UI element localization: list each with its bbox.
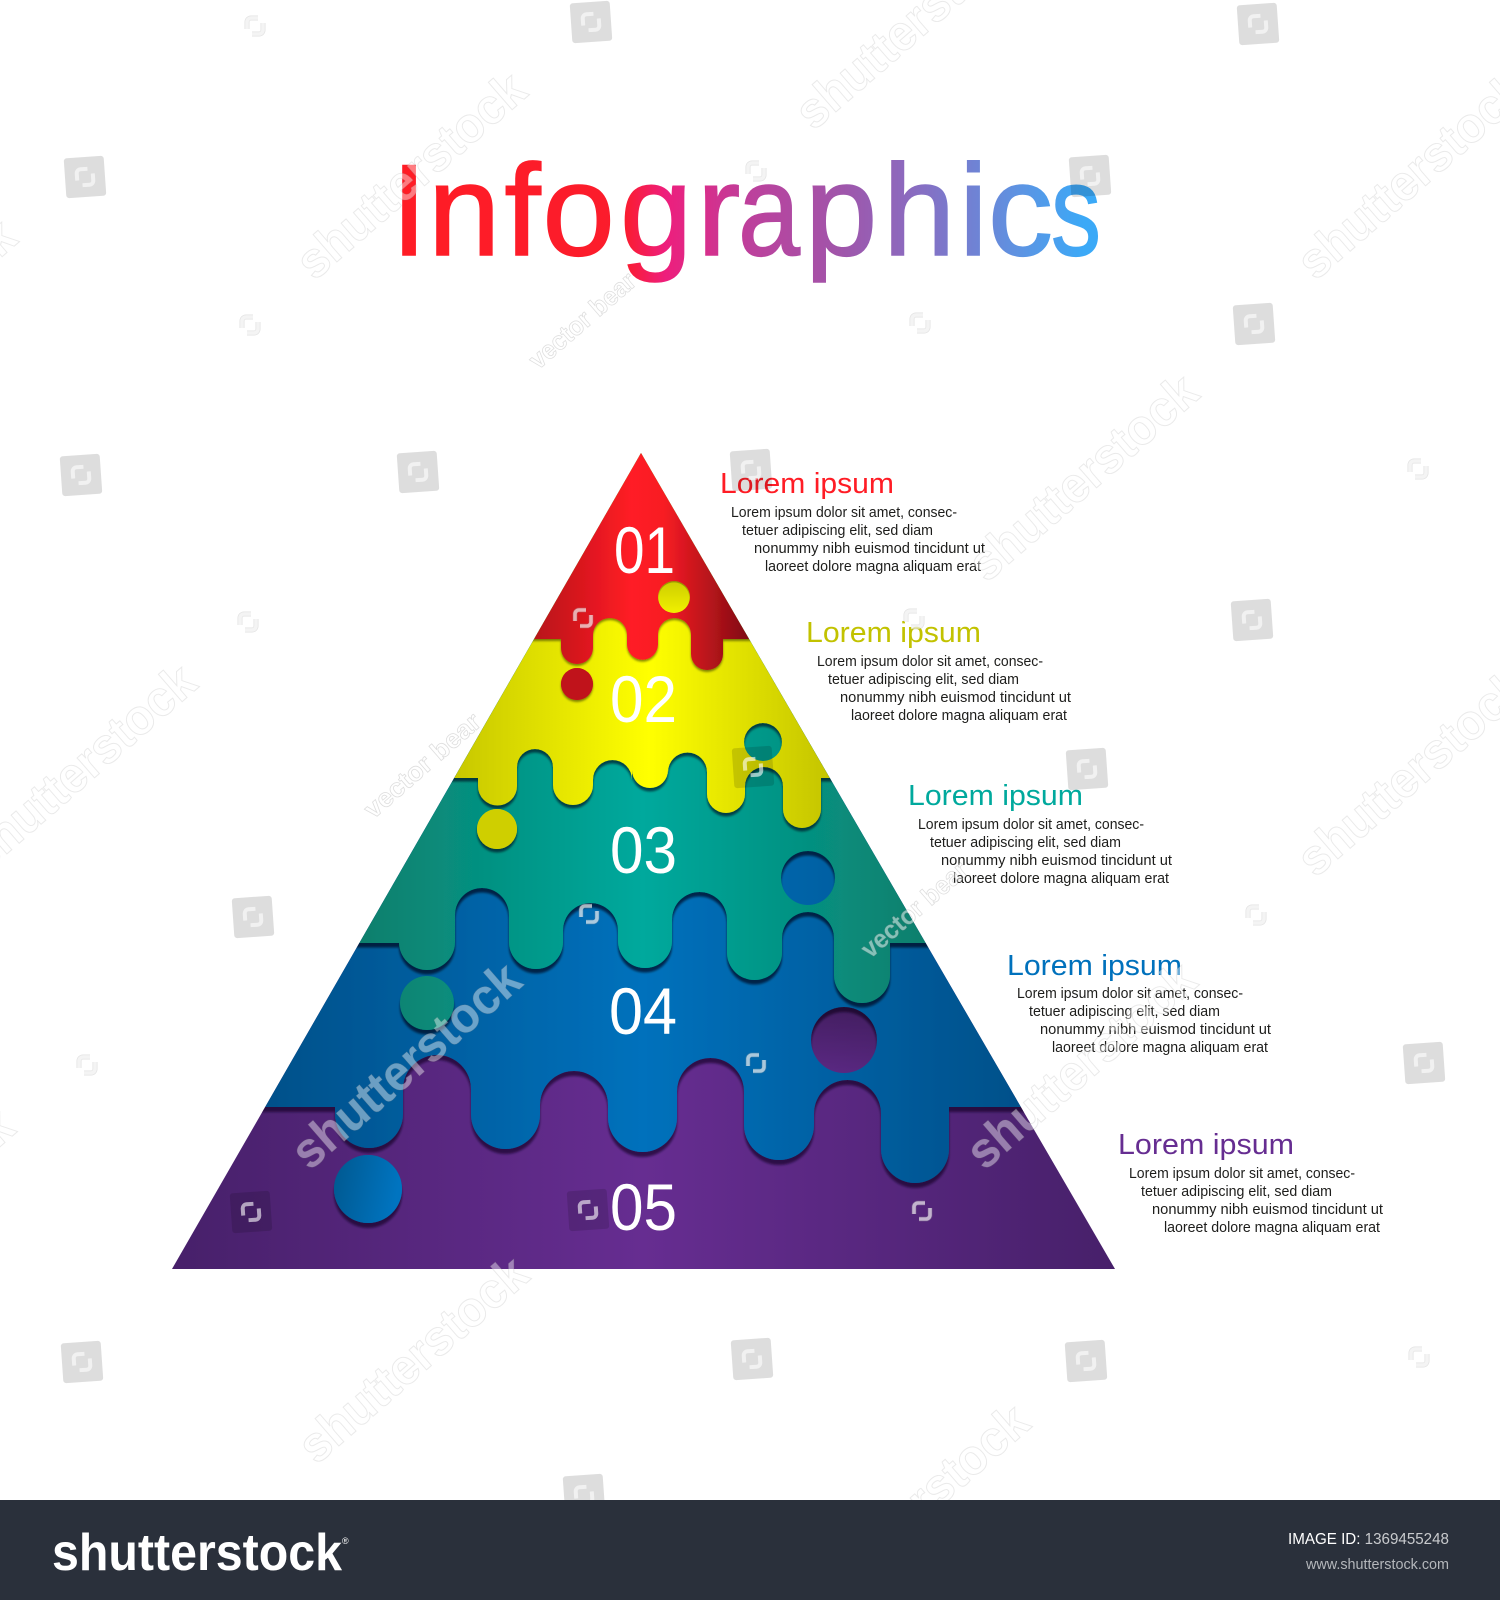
body 03 — [918, 816, 1173, 887]
layer 03: teal — [356, 453, 929, 1036]
body 05: laoreet dolore magna aliquam erat — [1164, 1219, 1381, 1236]
layer 02: yellow — [452, 453, 832, 854]
number 01: 01 — [614, 513, 675, 587]
heading 04: Lorem ipsum — [1007, 950, 1182, 982]
text block 04 — [1007, 950, 1272, 1056]
text block 05 — [1118, 1129, 1384, 1236]
title: f — [504, 137, 542, 283]
body 02 — [817, 653, 1072, 724]
number 03: 03 — [610, 813, 677, 887]
title: a — [738, 137, 801, 283]
body 01: Lorem ipsum dolor sit amet, consec- — [731, 504, 957, 521]
body 01: nonummy nibh euismod tincidunt ut — [754, 540, 986, 557]
watermark text: shutterstock — [287, 1244, 539, 1474]
heading 05: Lorem ipsum — [1118, 1129, 1294, 1161]
text block 01 — [720, 468, 986, 575]
text block 02 — [806, 617, 1072, 724]
body 05: nonummy nibh euismod tincidunt ut — [1152, 1201, 1384, 1218]
watermark text: vector bear — [522, 266, 642, 375]
watermark text: shutterstock — [957, 362, 1209, 592]
body 04: tetuer adipiscing elit, sed diam — [1029, 1003, 1220, 1020]
circle: red drop — [561, 668, 593, 700]
watermark text: vector bear — [358, 706, 487, 824]
pyramid chart — [172, 453, 1115, 1269]
title: p — [805, 137, 877, 283]
title: n — [428, 137, 500, 283]
text block 03 — [908, 780, 1173, 887]
footer bar — [0, 1500, 1500, 1600]
title: r — [697, 137, 740, 283]
number 02: 02 — [610, 662, 677, 736]
circle: yellow drop — [477, 809, 517, 849]
title: I — [391, 137, 427, 283]
body 03: nonummy nibh euismod tincidunt ut — [941, 852, 1173, 869]
body 03: tetuer adipiscing elit, sed diam — [930, 834, 1121, 851]
title: g — [620, 137, 692, 283]
layer 01: red — [532, 453, 751, 704]
body 05: Lorem ipsum dolor sit amet, consec- — [1129, 1165, 1355, 1182]
circle: blue drop — [334, 1155, 402, 1223]
watermark text: shutterstock — [280, 950, 532, 1180]
body 01 — [731, 504, 986, 575]
body 02: laoreet dolore magna aliquam erat — [851, 707, 1068, 724]
watermark text: vector bear — [854, 855, 974, 964]
heading 02: Lorem ipsum — [806, 617, 981, 649]
body 04: laoreet dolore magna aliquam erat — [1052, 1039, 1269, 1056]
body 02: tetuer adipiscing elit, sed diam — [828, 671, 1019, 688]
watermark text: shutterstock — [285, 60, 537, 290]
title: c — [988, 137, 1053, 283]
body 04: nonummy nibh euismod tincidunt ut — [1040, 1021, 1272, 1038]
title: o — [542, 137, 615, 283]
circle: yellow hole — [659, 582, 689, 612]
footer logo: shutterstock — [52, 1524, 342, 1582]
body 04: Lorem ipsum dolor sit amet, consec- — [1017, 985, 1243, 1002]
layer 05: purple — [172, 453, 1115, 1269]
body 05: tetuer adipiscing elit, sed diam — [1141, 1183, 1332, 1200]
body 03: Lorem ipsum dolor sit amet, consec- — [918, 816, 1144, 833]
registered mark: ® — [342, 1536, 349, 1546]
number 04: 04 — [609, 974, 677, 1048]
heading 03: Lorem ipsum — [908, 780, 1083, 812]
layer 04: blue — [262, 453, 1024, 1230]
circle: purple hole — [811, 1007, 877, 1056]
image id: IMAGE ID: 1369455248 — [1288, 1531, 1449, 1548]
title: h — [883, 137, 955, 283]
body 01: laoreet dolore magna aliquam erat — [765, 558, 982, 575]
body 03: laoreet dolore magna aliquam erat — [953, 870, 1170, 887]
footer url: www.shutterstock.com — [1305, 1556, 1449, 1573]
body 05 — [1129, 1165, 1384, 1236]
body 04 — [1017, 985, 1272, 1056]
title: s — [1051, 137, 1101, 283]
number 05: 05 — [610, 1170, 677, 1244]
body 01: tetuer adipiscing elit, sed diam — [742, 522, 933, 539]
title: i — [959, 137, 988, 283]
heading 01: Lorem ipsum — [720, 468, 894, 500]
watermark text: shutterstock — [955, 950, 1207, 1180]
body 02: Lorem ipsum dolor sit amet, consec- — [817, 653, 1043, 670]
body 02: nonummy nibh euismod tincidunt ut — [840, 689, 1072, 706]
